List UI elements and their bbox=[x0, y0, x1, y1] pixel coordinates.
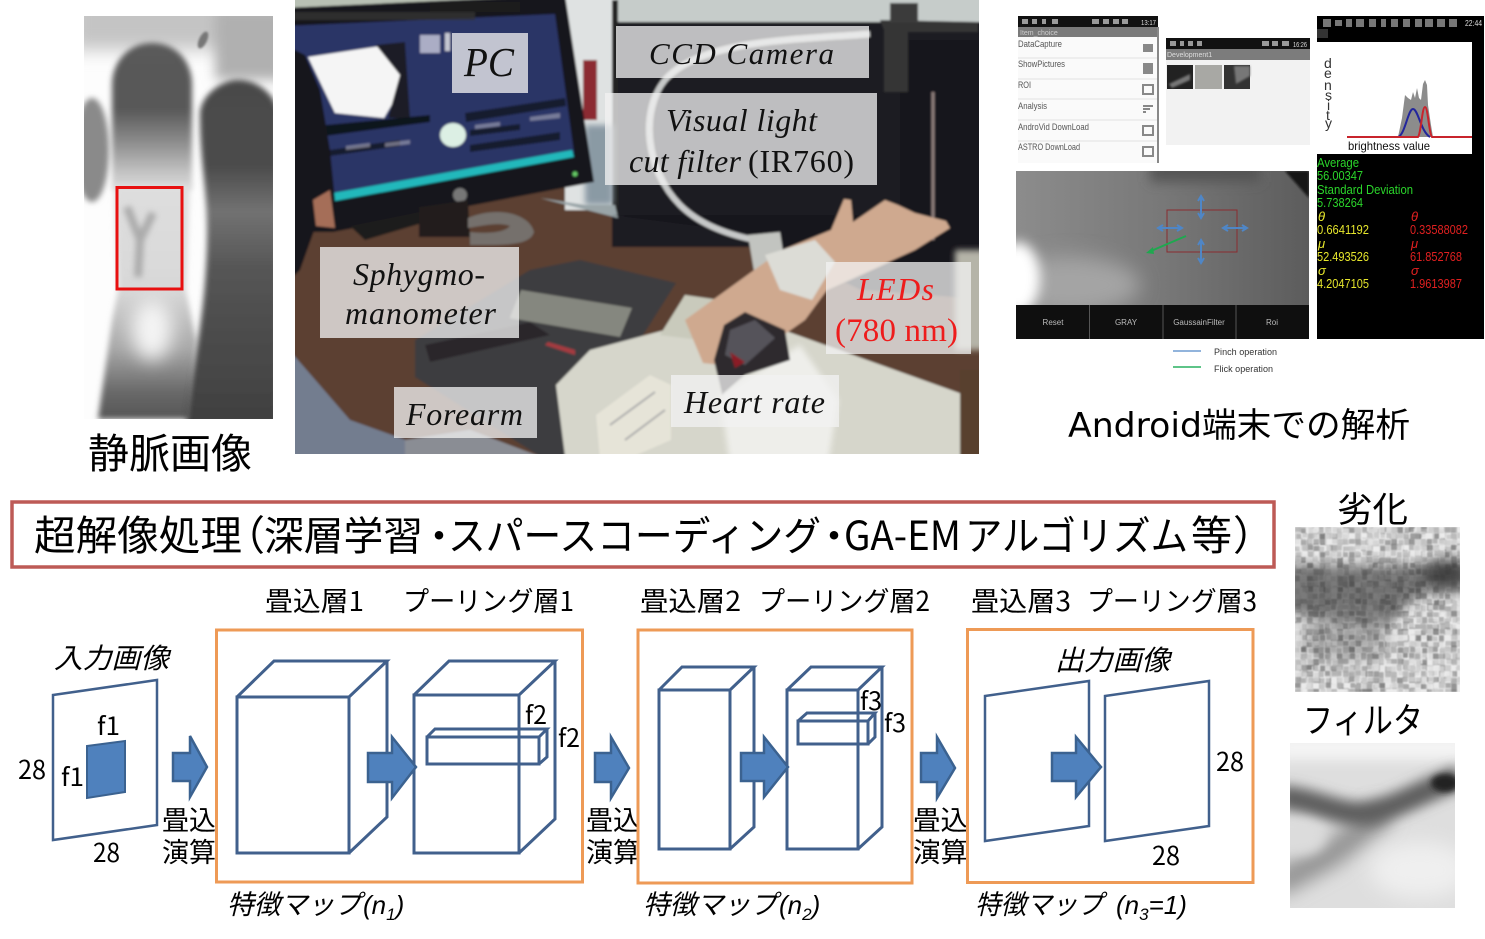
title box: super resolution: GA-EM bbox=[844, 504, 961, 562]
caption: android analysis: Android端末での解析 bbox=[1068, 406, 1410, 446]
feature map captions: ) bbox=[393, 890, 404, 920]
statistics values: 0.33588082 bbox=[1410, 222, 1468, 237]
layer headings bbox=[265, 580, 1257, 619]
input image plane: 入力画像 bbox=[54, 637, 172, 677]
caption: filter: フィルタ bbox=[1303, 693, 1423, 744]
label: PC bbox=[452, 33, 528, 93]
panel: feature map 1: f2 bbox=[525, 696, 547, 732]
feature map captions: 2 bbox=[801, 905, 812, 924]
histogram chart: e bbox=[1324, 65, 1332, 81]
label: heart rate bbox=[671, 375, 839, 427]
panel: feature map 2 bbox=[638, 630, 912, 883]
panel: android ROI selection screen: GRAY bbox=[1115, 318, 1138, 327]
arrow and label: convolution 1: 畳込 bbox=[162, 799, 216, 838]
label: LEDs wavelength: LEDs bbox=[856, 271, 934, 307]
panel: feature map 3 and output image: 28 bbox=[1216, 742, 1244, 779]
statistics values: μ bbox=[1410, 236, 1418, 251]
label: forearm bbox=[394, 387, 537, 438]
flick arrow bbox=[1146, 236, 1186, 254]
statistics values: Standard Deviation bbox=[1317, 182, 1413, 197]
panel: feature map 3 and output image: 28 bbox=[1152, 836, 1180, 873]
menu items: ShowPictures bbox=[1018, 59, 1065, 70]
wrist watch bbox=[714, 312, 790, 395]
panel: feature map 1: f2 bbox=[558, 719, 580, 755]
panel: android ROI selection screen: Reset bbox=[1043, 318, 1064, 327]
feature map captions: 特徴マップ bbox=[975, 883, 1108, 922]
feature map captions: 1 bbox=[386, 905, 396, 924]
panel: android ROI selection screen bbox=[1016, 171, 1309, 339]
statistics values: 5.738264 bbox=[1317, 195, 1363, 210]
feature map captions: 特徴マップ bbox=[643, 883, 782, 922]
panel: android menu screen: Item_choice bbox=[1020, 30, 1058, 37]
label: sphygmomanometer bbox=[320, 247, 519, 338]
feature map captions: (n bbox=[1116, 890, 1139, 920]
panel: android ROI selection screen: GaussainFilter bbox=[1173, 318, 1225, 327]
statistics values: Average bbox=[1317, 155, 1359, 170]
feature map captions: 3 bbox=[1139, 905, 1149, 924]
legend: pinch and flick bbox=[1173, 347, 1277, 374]
label: CCD Camera bbox=[616, 26, 869, 78]
title box: super resolution: （ bbox=[224, 502, 265, 562]
arm and hand bbox=[685, 199, 950, 367]
histogram chart: t bbox=[1326, 107, 1330, 123]
image: filtered vein bbox=[1290, 743, 1455, 908]
feature map captions: ) bbox=[809, 890, 820, 920]
input image plane: f1 bbox=[97, 707, 120, 743]
label: visual light cut filter: Visual light bbox=[666, 102, 818, 138]
arrow and label: convolution 1: 演算 bbox=[162, 831, 216, 870]
red region of interest bbox=[117, 188, 182, 289]
caption: vein image: 静脈画像 bbox=[88, 420, 252, 480]
feature map captions: (n bbox=[363, 890, 386, 920]
menu items: DataCapture bbox=[1018, 39, 1062, 50]
image: degraded vein bbox=[1295, 527, 1460, 692]
arrow and label: convolution 3 bbox=[913, 737, 968, 870]
panel: feature map 1 bbox=[216, 630, 582, 882]
title box: super resolution: 等 bbox=[1191, 502, 1232, 562]
panel: feature map 2: f3 bbox=[860, 682, 882, 718]
arrow and label: convolution 2 bbox=[586, 737, 640, 870]
panel: android thumbnails screen: Development1 bbox=[1167, 52, 1212, 59]
label: LEDs wavelength: (780 nm) bbox=[835, 313, 958, 349]
histogram chart: d bbox=[1324, 55, 1332, 71]
layer headings: 畳込層1 bbox=[265, 580, 364, 619]
histogram chart: s bbox=[1325, 87, 1332, 103]
input image plane bbox=[18, 637, 172, 870]
panel: feature map 3 and output image bbox=[968, 630, 1253, 882]
input image plane: 28 bbox=[93, 833, 120, 870]
feature map captions: (n bbox=[779, 890, 802, 920]
label: forearm: Forearm bbox=[405, 396, 523, 432]
label: LEDs wavelength bbox=[826, 262, 971, 354]
title box: super resolution: スパースコーディング bbox=[448, 504, 821, 562]
panel: android menu screen bbox=[1018, 16, 1159, 163]
histogram chart: y bbox=[1325, 115, 1332, 131]
panel: android menu screen: 13:17 bbox=[1141, 20, 1156, 27]
panel: vein image bbox=[84, 16, 273, 419]
layer headings: 畳込層2 bbox=[640, 580, 741, 619]
menu items bbox=[1018, 39, 1089, 153]
feature map captions: 特徴マップ bbox=[227, 883, 366, 922]
label: PC: PC bbox=[463, 39, 515, 85]
label: CCD Camera: CCD Camera bbox=[649, 36, 834, 71]
statistics values: θ bbox=[1411, 209, 1418, 224]
statistics values: 0.6641192 bbox=[1317, 222, 1369, 237]
title box: super resolution: 超解像処理 bbox=[34, 502, 242, 562]
histogram chart bbox=[1317, 42, 1472, 154]
monitor bbox=[285, 0, 594, 232]
layer headings: プーリング層3 bbox=[1087, 580, 1257, 619]
label: visual light cut filter bbox=[605, 93, 877, 185]
panel: android histogram analysis screen bbox=[1317, 16, 1484, 339]
histogram chart: i bbox=[1327, 97, 1330, 113]
person bbox=[295, 49, 336, 276]
label: visual light cut filter: cut filter bbox=[629, 143, 742, 179]
arrow and label: convolution 2: 演算 bbox=[586, 831, 640, 870]
title box: super resolution: 深層学習 bbox=[264, 504, 423, 562]
panel: android thumbnails screen: 16:26 bbox=[1293, 42, 1307, 49]
panel: android thumbnails screen bbox=[1166, 38, 1310, 145]
statistics values: 1.9613987 bbox=[1410, 276, 1462, 291]
panel: feature map 3 and output image: 出力画像 bbox=[1055, 639, 1173, 679]
histogram chart: n bbox=[1324, 77, 1332, 93]
arrow and label: convolution 2: 畳込 bbox=[586, 799, 640, 838]
panel: android histogram analysis screen: 22:44 bbox=[1465, 19, 1482, 28]
panel: feature map 2: f3 bbox=[884, 704, 906, 740]
statistics values: 56.00347 bbox=[1317, 168, 1363, 183]
feature map captions: =1) bbox=[1149, 890, 1187, 920]
legend: pinch and flick: Flick operation bbox=[1214, 364, 1273, 374]
menu items: Analysis bbox=[1018, 101, 1047, 112]
menu items: AndroVid DownLoad bbox=[1018, 122, 1089, 133]
statistics values: θ bbox=[1318, 209, 1325, 224]
title box: super resolution: ・ bbox=[419, 504, 459, 562]
shirt sleeve and cushion bbox=[404, 430, 538, 454]
layer headings: プーリング層2 bbox=[759, 580, 930, 619]
layer headings: プーリング層1 bbox=[403, 580, 574, 619]
label: sphygmomanometer: manometer bbox=[345, 295, 497, 331]
caption: degraded: 劣化 bbox=[1337, 482, 1408, 533]
layer headings: 畳込層3 bbox=[971, 580, 1071, 619]
input image plane: 28 bbox=[18, 750, 46, 787]
arrow and label: convolution 3: 演算 bbox=[913, 831, 968, 870]
statistics values: σ bbox=[1411, 263, 1420, 278]
input image plane: f1 bbox=[61, 758, 84, 794]
title box: super resolution: アルゴリズム bbox=[965, 504, 1188, 562]
arrow and label: convolution 3: 畳込 bbox=[913, 799, 968, 838]
photo: measurement setup bbox=[285, 0, 989, 464]
statistics values: 4.2047105 bbox=[1317, 276, 1369, 291]
panel: android ROI selection screen: Roi bbox=[1266, 318, 1278, 327]
statistics values bbox=[1317, 155, 1468, 291]
title box: super resolution: ） bbox=[1233, 502, 1274, 562]
statistics values: μ bbox=[1317, 236, 1325, 251]
title box: super resolution bbox=[12, 502, 1274, 567]
title box: super resolution: ・ bbox=[814, 504, 854, 562]
blood pressure monitor bbox=[415, 260, 676, 464]
menu items: ROI bbox=[1018, 80, 1031, 91]
menu items: ASTRO DownLoad bbox=[1018, 142, 1080, 153]
statistics values: 61.852768 bbox=[1410, 249, 1462, 264]
label: sphygmomanometer: Sphygmo- bbox=[353, 256, 485, 292]
pinch arrows bbox=[1158, 196, 1247, 263]
legend: pinch and flick: Pinch operation bbox=[1214, 347, 1277, 357]
lamp arm bbox=[649, 34, 870, 240]
statistics values: 52.493526 bbox=[1317, 249, 1369, 264]
label: heart rate: Heart rate bbox=[683, 384, 825, 420]
feature map captions bbox=[227, 883, 1187, 924]
statistics values: σ bbox=[1318, 263, 1327, 278]
histogram chart: brightness value bbox=[1348, 139, 1430, 153]
camera bbox=[880, 20, 978, 92]
label: visual light cut filter: (IR760) bbox=[748, 143, 854, 179]
monitor stand bbox=[419, 200, 470, 237]
arrow and label: convolution 1 bbox=[162, 736, 216, 870]
